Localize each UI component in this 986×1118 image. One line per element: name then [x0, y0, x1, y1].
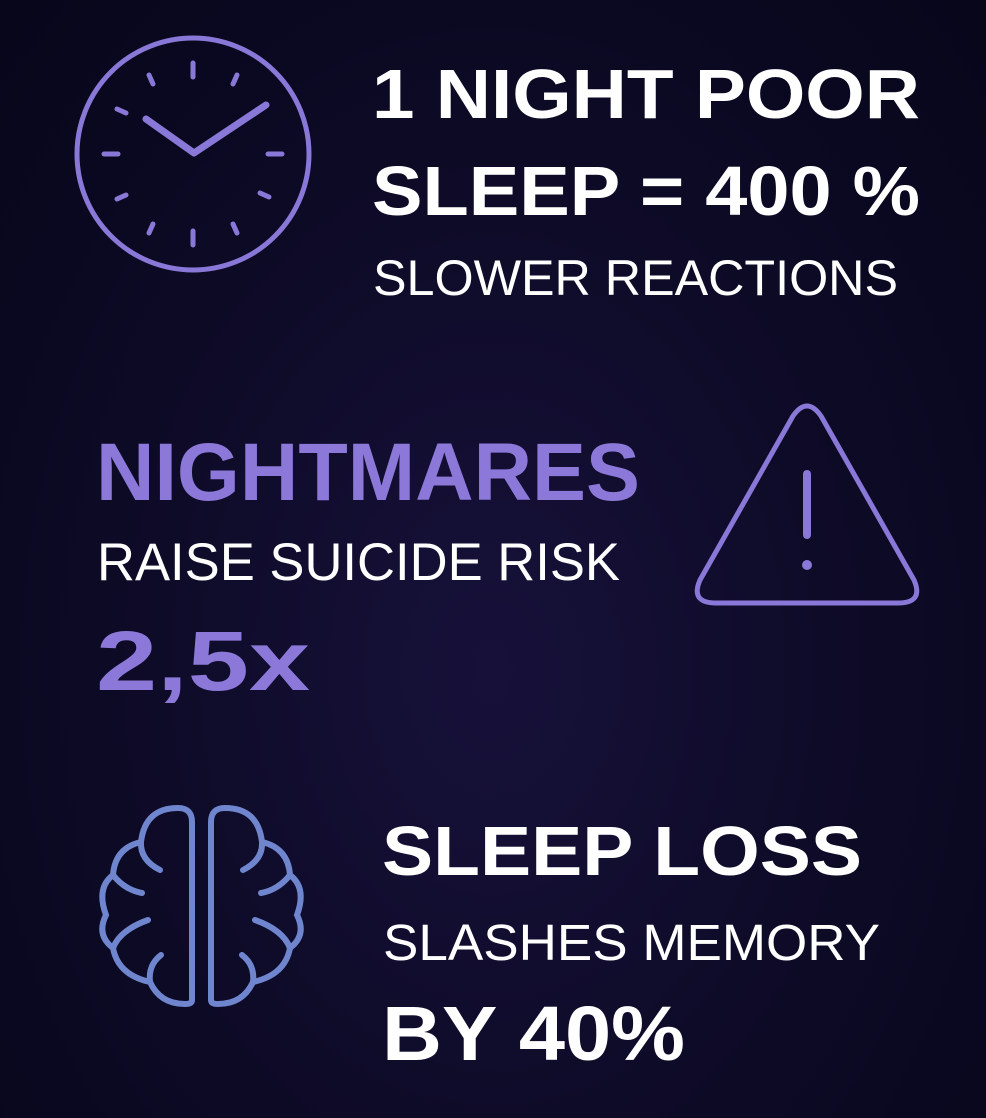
text: slower reactions: SLOWER REACTIONS [373, 250, 898, 306]
heading: nightmares: NIGHTMARES [96, 427, 640, 518]
stat: 2,5x: 2,5x [96, 614, 310, 708]
heading: 1 night poor sleep: 1 NIGHT POOR [372, 55, 920, 133]
stat: by 40%: BY 40% [382, 991, 685, 1077]
heading: 1 night poor sleep [372, 55, 920, 230]
icon: clock [77, 38, 309, 270]
icon: brain [102, 808, 301, 1004]
text: slashes memory: SLASHES MEMORY [383, 914, 880, 971]
heading: sleep loss: SLEEP LOSS [382, 812, 862, 890]
icon: warning triangle [697, 406, 917, 603]
heading: 1 night poor sleep: SLEEP = 400 % [372, 152, 920, 230]
text: raise suicide risk: RAISE SUICIDE RISK [97, 533, 620, 592]
